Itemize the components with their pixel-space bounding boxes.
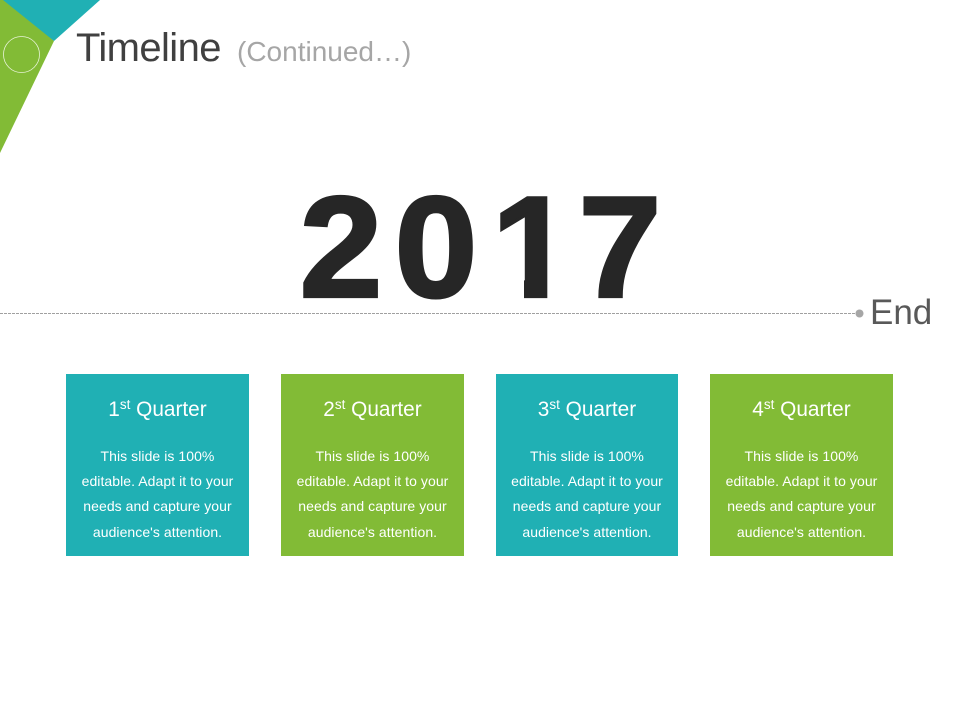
card: 4th quarter: editable. Adapt it to your [726,473,877,489]
card: 1st quarter: This slide is 100% [101,448,214,464]
card: 3rd quarter: editable. Adapt it to your [511,473,663,489]
corner decoration [0,0,100,153]
card: 1st quarter: audience's attention. [93,524,222,540]
card: 3rd quarter [496,374,678,556]
card: 4th quarter [710,374,893,556]
card: 1st quarter: editable. Adapt it to your [82,473,233,489]
card: 2nd quarter: editable. Adapt it to your [297,473,448,489]
card: 4th quarter: audience's attention. [737,524,866,540]
card: 4th quarter: 4st Quarter [752,397,851,421]
year: 7 [579,167,661,327]
card: 1st quarter: needs and capture your [83,498,232,514]
card: 2nd quarter: needs and capture your [298,498,447,514]
year [300,167,661,327]
card: 3rd quarter: 3st Quarter [538,397,636,421]
year: 0 [394,167,477,327]
card: 2nd quarter: audience's attention. [308,524,437,540]
card: 1st quarter: 1st Quarter [108,397,207,421]
card: 3rd quarter: audience's attention. [522,524,652,540]
card: 3rd quarter: needs and capture your [513,498,661,514]
card: 4th quarter: This slide is 100% [745,448,858,464]
card: 2nd quarter: This slide is 100% [316,448,429,464]
card: 1st quarter [66,374,249,556]
subtitle: (Continued…) [237,36,411,67]
title: Timeline [76,26,221,70]
end label: End [870,293,932,332]
card: 4th quarter: needs and capture your [727,498,876,514]
card: 2nd quarter: 2st Quarter [323,397,422,421]
card: 2nd quarter [281,374,464,556]
year: 1 [492,167,574,327]
timeline line [0,310,864,318]
card: 3rd quarter: This slide is 100% [530,448,644,464]
year: 2 [300,167,382,327]
